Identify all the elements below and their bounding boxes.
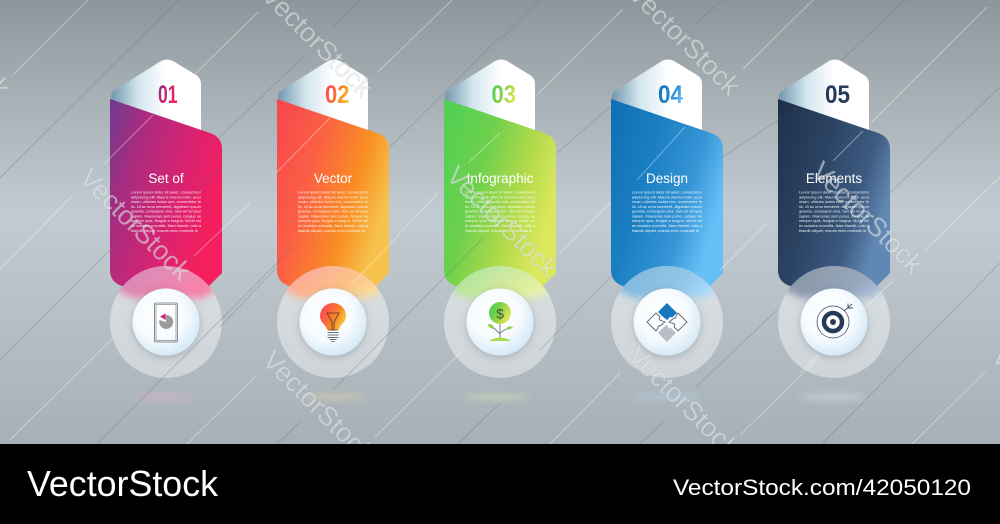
body text 1: ex sodales convallis. Nam blandit, odio a xyxy=(131,223,202,228)
card 2 xyxy=(277,60,389,402)
body text 3: gravida, consequat urna. Sed vel tempus xyxy=(465,209,535,214)
body text 3: ex sodales convallis. Nam blandit, odio a xyxy=(465,223,536,228)
number 02: 02 xyxy=(325,81,350,109)
number 03: 03 xyxy=(492,81,516,109)
body text 5: Lorem ipsum dolor sit amet, consectetur xyxy=(799,190,870,194)
body 4 xyxy=(611,99,723,289)
title 3: Infographic xyxy=(467,171,534,186)
body text 5: ex sodales convallis. Nam blandit, odio a xyxy=(799,223,870,228)
body text 3: sapien. Maecenas sem purus, congue ne xyxy=(465,213,535,218)
title 5: Elements xyxy=(806,171,862,186)
body text 3: msan, ultricies luctus nec, consectetur fe xyxy=(465,199,535,204)
tab 2 xyxy=(278,60,368,140)
body text 2: semper quis, feugiat a magna. Morbi vel xyxy=(298,218,368,223)
body text 5: blandit aliquet, mauris enim molestie le xyxy=(799,228,866,233)
tab 1 xyxy=(111,60,201,140)
floor glow 1 xyxy=(134,394,198,400)
glass ring 5 xyxy=(778,266,890,378)
body text 3: blandit aliquet, mauris enim molestie le xyxy=(465,228,532,233)
icon: puzzle pieces xyxy=(647,303,687,342)
watermarks: VectorStock xyxy=(622,340,745,463)
hub 1 xyxy=(132,288,200,356)
body text 4 xyxy=(632,190,703,233)
glass ring 4 xyxy=(611,266,723,378)
floor glow 2 xyxy=(303,394,367,400)
body text 2: Lorem ipsum dolor sit amet, consectetur xyxy=(298,190,369,194)
tab 3 xyxy=(445,60,535,140)
body text 2: sapien. Maecenas sem purus, congue ne xyxy=(298,213,368,218)
floor glow 5 xyxy=(799,394,867,400)
footer logo: VectorStock xyxy=(27,463,219,504)
body text 4: blandit aliquet, mauris enim molestie le xyxy=(632,228,699,233)
hub 3 xyxy=(466,288,534,356)
tab 5 xyxy=(779,60,869,140)
floor glow 4 xyxy=(633,394,701,400)
body text 4: Lorem ipsum dolor sit amet, consectetur xyxy=(632,190,703,194)
body text 5: msan, ultricies luctus nec, consectetur fe xyxy=(799,199,869,204)
body text 4: msan, ultricies luctus nec, consectetur fe xyxy=(632,199,702,204)
icon: money plant: $ xyxy=(496,306,504,322)
body 5 xyxy=(778,99,890,289)
title 1: Set of xyxy=(148,171,184,186)
body text 3: semper quis, feugiat a magna. Morbi vel xyxy=(465,218,535,223)
hub 5 xyxy=(800,288,868,356)
body text 2: gravida, consequat urna. Sed vel tempus xyxy=(298,209,368,214)
body text 3: Lorem ipsum dolor sit amet, consectetur xyxy=(465,190,536,194)
body text 2: lis. Ut ac urna hendrerit, dignissim ipsum xyxy=(298,204,368,209)
body text 3: adipiscing elit. Mauris viverra tortor accu xyxy=(465,194,535,199)
number 05: 05 xyxy=(825,81,850,109)
body text 5: gravida, consequat urna. Sed vel tempus xyxy=(799,209,869,214)
body text 4: sapien. Maecenas sem purus, congue ne xyxy=(632,213,702,218)
card 5 xyxy=(778,60,890,402)
watermarks: VectorStock xyxy=(257,345,380,468)
title 2: Vector xyxy=(314,171,353,186)
body text 1: semper quis, feugiat a magna. Morbi vel xyxy=(131,218,201,223)
hub 4 xyxy=(634,288,700,356)
body text 1: gravida, consequat urna. Sed vel tempus xyxy=(131,209,201,214)
body text 3 xyxy=(465,190,536,233)
tab 4 xyxy=(612,60,702,140)
body text 2: adipiscing elit. Mauris viverra tortor accu xyxy=(298,194,368,199)
body text 1: blandit aliquet, mauris enim molestie le xyxy=(131,228,198,233)
watermarks: VectorStock xyxy=(74,163,197,286)
number 01: 01 xyxy=(158,81,178,109)
icon: target with arrow xyxy=(817,304,853,338)
body text 4: lis. Ut ac urna hendrerit, dignissim ipsum xyxy=(632,204,702,209)
body 1 xyxy=(110,99,222,289)
footer url: VectorStock.com/42050120 xyxy=(673,475,971,500)
glass ring 2 xyxy=(277,266,389,378)
icon: light bulb xyxy=(320,303,346,342)
body text 1: adipiscing elit. Mauris viverra tortor accu xyxy=(131,194,201,199)
body text 4: semper quis, feugiat a magna. Morbi vel xyxy=(632,218,702,223)
body text 1: msan, ultricies luctus nec, consectetur fe xyxy=(131,199,201,204)
body text 1: Lorem ipsum dolor sit amet, consectetur xyxy=(131,190,202,194)
body text 4: ex sodales convallis. Nam blandit, odio a xyxy=(632,223,703,228)
hub 2 xyxy=(300,288,366,356)
body text 5: semper quis, feugiat a magna. Morbi vel xyxy=(799,218,869,223)
body text 1: sapien. Maecenas sem purus, congue ne xyxy=(131,213,201,218)
body text 3: lis. Ut ac urna hendrerit, dignissim ipsum xyxy=(465,204,535,209)
icon: money plant xyxy=(488,302,513,341)
body text 1 xyxy=(131,190,202,233)
body text 5: lis. Ut ac urna hendrerit, dignissim ipsum xyxy=(799,204,869,209)
body text 2: msan, ultricies luctus nec, consectetur fe xyxy=(298,199,368,204)
body 2 xyxy=(277,99,389,289)
body text 5: sapien. Maecenas sem purus, congue ne xyxy=(799,213,869,218)
footer bar xyxy=(0,444,1000,524)
body text 1: lis. Ut ac urna hendrerit, dignissim ipsum xyxy=(131,204,201,209)
body text 2: blandit aliquet, mauris enim molestie le xyxy=(298,228,365,233)
card 1 xyxy=(110,60,222,402)
floor glow 3 xyxy=(463,394,531,400)
watermarks: VectorStock xyxy=(806,156,929,279)
watermarks: VectorStock xyxy=(441,160,564,283)
card 3 xyxy=(444,60,556,402)
title 4: Design xyxy=(646,171,688,186)
body text 4: adipiscing elit. Mauris viverra tortor accu xyxy=(632,194,702,199)
card 4 xyxy=(611,60,723,401)
icon: phone with pie chart xyxy=(154,303,178,342)
glass ring 3 xyxy=(444,266,556,378)
glass ring 1 xyxy=(110,266,222,378)
body text 4: gravida, consequat urna. Sed vel tempus xyxy=(632,209,702,214)
body text 5: adipiscing elit. Mauris viverra tortor accu xyxy=(799,194,869,199)
body text 2 xyxy=(298,190,369,233)
body 3 xyxy=(444,99,556,289)
body text 2: ex sodales convallis. Nam blandit, odio a xyxy=(298,223,369,228)
body text 5 xyxy=(799,190,870,233)
number 04: 04 xyxy=(658,81,683,109)
